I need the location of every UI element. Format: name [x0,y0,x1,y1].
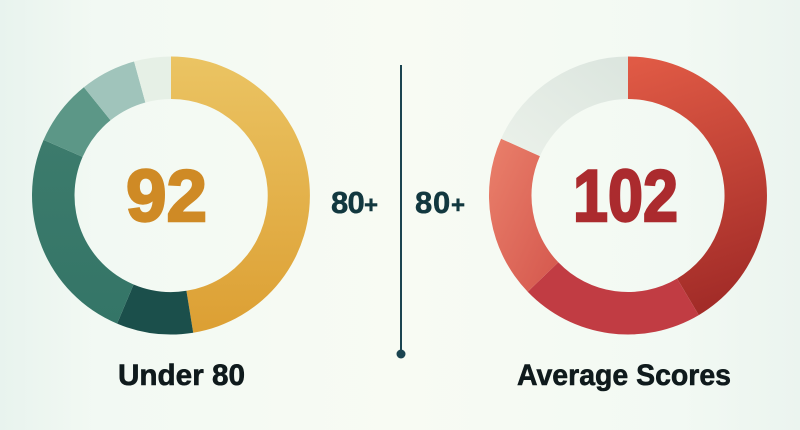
segment: grey [501,56,628,156]
right donut value: 102 [573,156,678,237]
segment: lightest [134,56,171,102]
right caption: Average Scores [517,359,731,392]
segment: yellow [171,56,310,333]
left caption: Under 80 [118,359,245,392]
left donut value: 92 [126,156,207,237]
segment: pale green [84,62,145,120]
divider line with end dot [396,65,406,358]
left donut chart [32,56,310,334]
segment: dark teal [117,284,193,334]
segment: salmon [489,139,558,292]
left 80+ label: 80+ [331,185,378,220]
segment: dark red [628,56,767,315]
right donut chart [489,56,767,334]
segment: crimson [528,262,699,334]
segment: mid green [44,87,110,157]
right 80+ label: 80+ [415,185,465,220]
segment: green [32,140,134,324]
